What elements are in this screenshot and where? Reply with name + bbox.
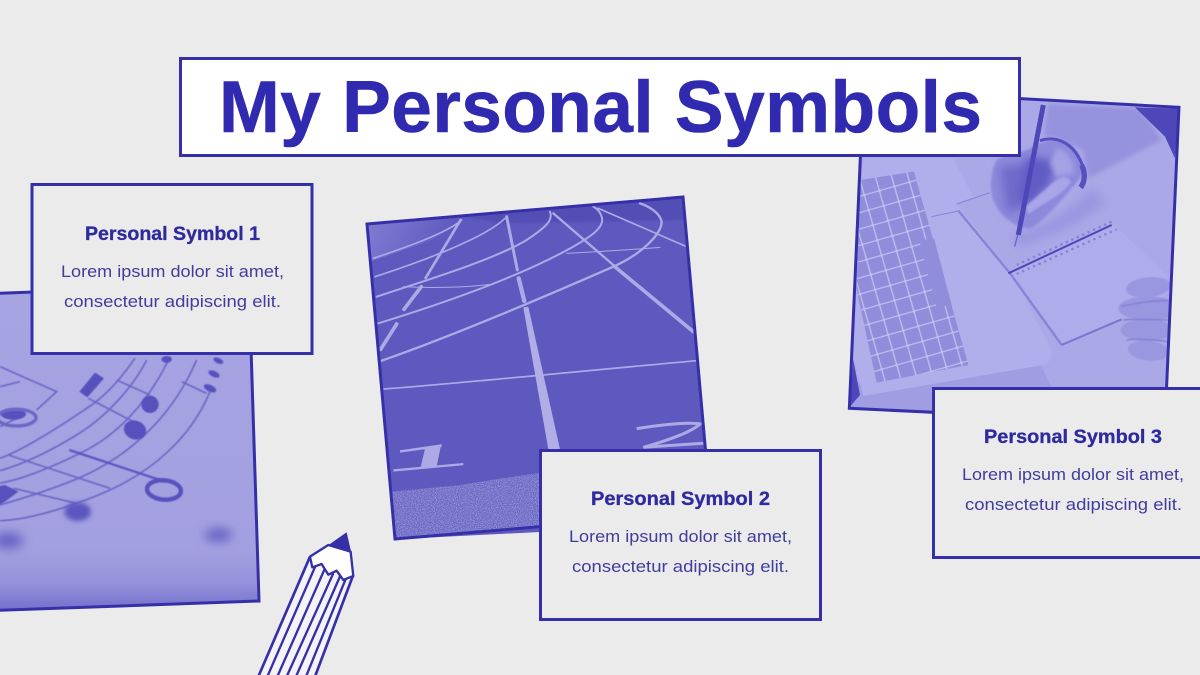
trackpad strip xyxy=(919,238,952,307)
card: personal symbol 2 xyxy=(540,450,820,620)
pencil tip xyxy=(328,532,351,553)
dark top band xyxy=(472,199,684,223)
centre lane line xyxy=(523,307,560,449)
body text: consectetur adipiscing elit. xyxy=(572,557,789,576)
photo border xyxy=(0,284,259,611)
staff lines xyxy=(0,357,210,521)
lane number 1 xyxy=(393,444,463,472)
title: My Personal Symbols xyxy=(219,67,982,148)
pencil body xyxy=(258,558,353,675)
body text: consectetur adipiscing elit. xyxy=(64,292,281,311)
pencil wood xyxy=(310,545,353,580)
body text: Lorem ipsum dolor sit amet, xyxy=(962,465,1184,484)
laptop body xyxy=(860,363,1041,396)
photo: writing at laptop xyxy=(848,97,1180,414)
notebook lower page xyxy=(1010,225,1168,344)
notes xyxy=(0,356,224,507)
heading: Personal Symbol 3 xyxy=(984,427,1162,448)
card: personal symbol 1 xyxy=(32,184,312,354)
notebook edge xyxy=(958,211,1062,345)
desk below laptop xyxy=(851,366,1052,410)
photo: sheet music xyxy=(0,280,270,615)
hand xyxy=(991,140,1083,228)
pencil in hand xyxy=(1018,105,1043,235)
sleeve xyxy=(1044,104,1162,178)
photo border xyxy=(367,197,711,539)
note beam xyxy=(69,450,165,482)
left hand fingers xyxy=(1118,277,1170,361)
hollow note xyxy=(146,479,182,501)
infield texture xyxy=(392,473,539,538)
cuff xyxy=(1040,139,1084,188)
body text xyxy=(569,527,792,576)
heading: Personal Symbol 2 xyxy=(591,489,770,510)
pencil icon xyxy=(258,532,353,675)
photo: running track xyxy=(360,190,717,547)
light top-left corner xyxy=(368,220,438,261)
photo border xyxy=(849,90,1179,423)
body text xyxy=(61,262,284,311)
body text: Lorem ipsum dolor sit amet, xyxy=(61,262,284,281)
pencil stripes xyxy=(267,563,347,675)
keyboard xyxy=(857,172,968,383)
card: personal symbol 3 xyxy=(934,388,1200,558)
stray line xyxy=(932,211,960,217)
blurred notes xyxy=(0,502,232,549)
body text: consectetur adipiscing elit. xyxy=(965,495,1182,514)
lane number 2 xyxy=(637,423,703,447)
hollow note left xyxy=(0,409,36,426)
notebook upper page xyxy=(957,187,1115,272)
heading: Personal Symbol 1 xyxy=(85,224,260,245)
spiral binding xyxy=(1008,225,1112,273)
body text: Lorem ipsum dolor sit amet, xyxy=(569,527,792,546)
body text xyxy=(962,465,1184,514)
hand shadow on page xyxy=(1016,190,1104,245)
